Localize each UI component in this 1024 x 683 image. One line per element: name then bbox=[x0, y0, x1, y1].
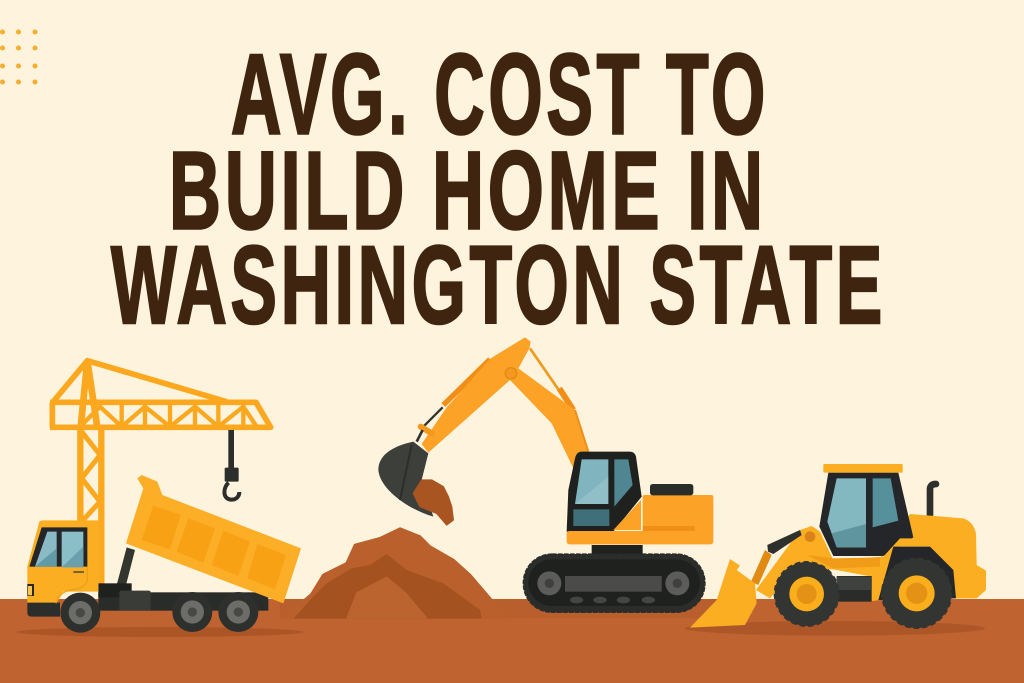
hydraulic lift bbox=[117, 547, 135, 585]
title bbox=[111, 32, 886, 347]
illustration: dump truck bbox=[27, 475, 301, 633]
loader shadow bbox=[685, 621, 985, 636]
hook bbox=[224, 430, 239, 500]
loader wheels bbox=[775, 559, 951, 628]
loader cab bbox=[819, 464, 913, 556]
illustration: tower crane bbox=[50, 361, 271, 585]
cab bbox=[27, 520, 98, 617]
bucket bbox=[378, 442, 453, 525]
dump bed bbox=[126, 475, 301, 603]
illustration: wheel loader bbox=[685, 464, 986, 636]
excavator body bbox=[567, 452, 713, 555]
crawler track bbox=[523, 554, 705, 612]
decorative dot grid bbox=[0, 30, 38, 84]
hood bbox=[880, 514, 986, 598]
illustration: excavator bbox=[378, 337, 713, 612]
exhaust bbox=[930, 484, 936, 515]
chassis bbox=[98, 583, 268, 611]
loader bucket bbox=[690, 559, 757, 628]
illustration: dirt pile bbox=[285, 529, 505, 619]
ground bbox=[0, 599, 1024, 683]
truck wheels bbox=[60, 592, 258, 633]
loader arm and frame bbox=[751, 526, 956, 602]
truck shadow bbox=[17, 627, 303, 637]
excavator arm bbox=[417, 337, 588, 472]
